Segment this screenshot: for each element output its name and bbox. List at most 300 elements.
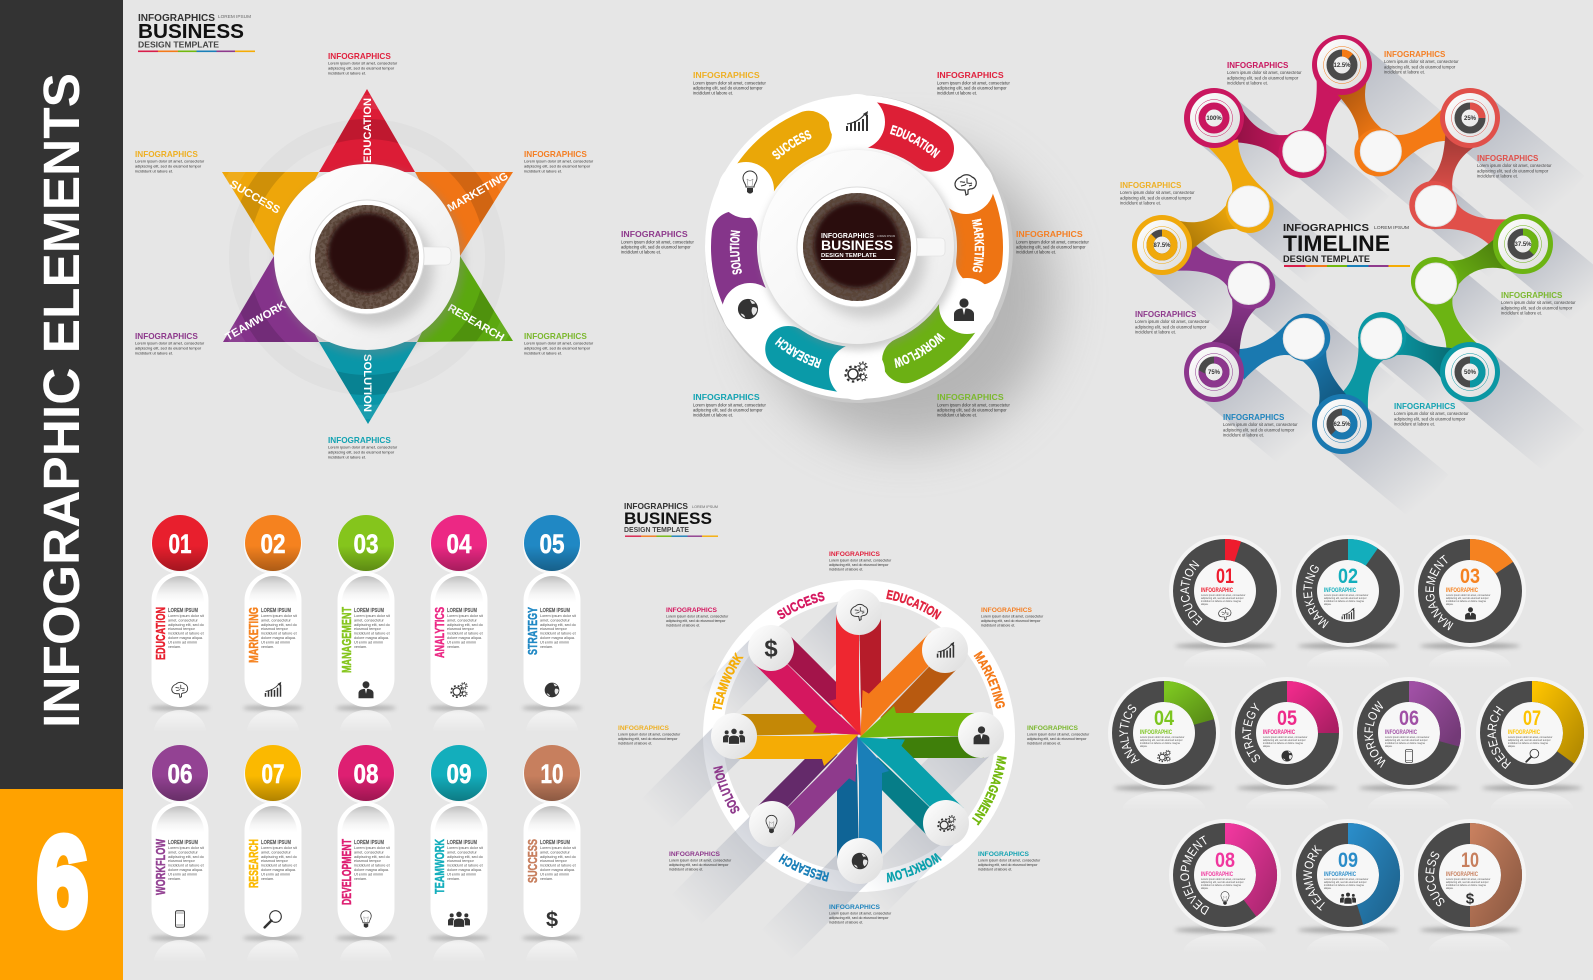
donut 04 analytics: 04 <box>1154 707 1174 730</box>
coffee cup with title: INFOGRAPHICS <box>821 233 874 240</box>
label: solution: Lorem ipsum dolor sit amet, consectetur <box>669 859 732 863</box>
star triangles <box>212 89 522 424</box>
connector: yellow with small node <box>1146 128 1296 277</box>
card 03 management: Ut enim ad minim <box>354 640 383 644</box>
label: solution: INFOGRAPHICS <box>621 229 688 239</box>
donut 06 workflow: Lorem ipsum dolor sit amet, consectetur <box>1385 736 1430 739</box>
card 05 strategy: LOREM IPSUM <box>540 608 570 614</box>
label: teamwork: Lorem ipsum dolor sit amet, consectetur <box>618 733 681 737</box>
card 10 success: SUCCESS <box>525 839 540 883</box>
label: 87.5%: incididunt ut labore et. <box>1120 200 1161 206</box>
donut 03 management: adipiscing elit, sed do eiusmod tempor <box>1446 597 1489 600</box>
faint background rings <box>229 119 505 395</box>
card 07 research: veniam. <box>261 877 274 881</box>
label: research: adipiscing elit, sed do eiusmod tempor <box>524 346 591 350</box>
label: 75%: INFOGRAPHICS <box>1135 310 1197 319</box>
label: solution: incididunt ut labore et. <box>621 250 661 255</box>
donut 05 strategy: Lorem ipsum dolor sit amet, consectetur <box>1263 736 1308 739</box>
heading: timeline: DESIGN TEMPLATE <box>1283 254 1370 264</box>
card 07 research <box>243 745 303 962</box>
label: management: Lorem ipsum dolor sit amet, consectetur <box>1027 733 1090 737</box>
donut 06 workflow: incididunt ut labore et dolore magna <box>1385 742 1425 745</box>
label: success: INFOGRAPHICS <box>693 70 760 80</box>
card 04 analytics <box>429 515 489 732</box>
label: success: Lorem ipsum dolor sit amet, consectetur <box>693 80 766 85</box>
donut 08 development <box>1169 819 1281 935</box>
label: teamwork: adipiscing elit, sed do eiusmod tempor <box>135 346 202 350</box>
donut 07 research: INFOGRAPHIC <box>1508 730 1541 736</box>
label: education <box>328 52 398 76</box>
label: teamwork <box>135 332 205 356</box>
ring drop shadow <box>755 145 1055 445</box>
card 08 development: dolore magna aliqua. <box>354 868 389 872</box>
card 03 management: incididunt ut labore et <box>354 632 391 636</box>
ring segment labels: WORKFLOW <box>894 332 946 368</box>
donut 03 management: aliqua. <box>1446 603 1454 606</box>
heading: timeline <box>1283 222 1410 267</box>
node: 75%: 75% <box>1208 370 1221 376</box>
coffee cup with title: BUSINESS <box>821 238 893 253</box>
connector: orange with small node <box>1310 49 1460 198</box>
card 06 workflow: veniam. <box>168 877 181 881</box>
curved ring labels: SUCCESS <box>777 592 825 619</box>
card 04 analytics: LOREM IPSUM <box>447 608 477 614</box>
card 07 research: amet, consectetur <box>261 850 292 854</box>
curved ring labels: MARKETING <box>974 650 1005 709</box>
card 01 education: amet, consectetur <box>168 618 199 622</box>
label: success: adipiscing elit, sed do eiusmod tempor <box>693 86 763 90</box>
ring segment labels: SUCCESS <box>772 130 812 160</box>
label: 50%: incididunt ut labore et. <box>1394 422 1435 426</box>
label: education: Lorem ipsum dolor sit amet, consectetur <box>937 80 1010 85</box>
ring icons <box>738 111 976 382</box>
label: education <box>937 70 1010 96</box>
curved ring labels: TEAMWORK <box>712 652 744 710</box>
label: 87.5%: adipiscing elit, sed do eiusmod tempor <box>1120 195 1192 200</box>
star arm labels: SOLUTION <box>361 354 373 412</box>
label: research: incididunt ut labore et. <box>829 921 863 925</box>
card 06 workflow: incididunt ut labore et <box>168 864 205 868</box>
card 04 analytics: veniam. <box>447 645 460 649</box>
label: management: adipiscing elit, sed do eiusmod tempor <box>1027 737 1087 741</box>
card 08 development: veniam. <box>354 877 367 881</box>
card 08 development: amet, consectetur <box>354 850 385 854</box>
card 01 education: veniam. <box>168 645 181 649</box>
label: marketing: Lorem ipsum dolor sit amet, consectetur <box>981 615 1044 619</box>
card 06 workflow: Ut enim ad minim <box>168 872 197 876</box>
donut 01 education <box>1169 535 1281 651</box>
label: marketing <box>981 607 1044 628</box>
donut 02 marketing <box>1292 535 1404 651</box>
label: success: INFOGRAPHICS <box>135 150 198 159</box>
card 09 teamwork: incididunt ut labore et <box>447 864 484 868</box>
heading: business template 2: LOREM IPSUM <box>692 505 718 509</box>
label: workflow: Lorem ipsum dolor sit amet, consectetur <box>937 402 1010 407</box>
label: workflow: INFOGRAPHICS <box>937 392 1004 402</box>
card 03 management: dolore magna aliqua. <box>354 636 389 640</box>
curved ring labels <box>712 590 1007 882</box>
label: solution: incididunt ut labore et. <box>328 454 366 460</box>
label: 50%: Lorem ipsum dolor sit amet, consectetur <box>1394 411 1469 416</box>
label: workflow: adipiscing elit, sed do eiusmod tempor <box>937 408 1007 412</box>
donut 04 analytics: adipiscing elit, sed do eiusmod tempor <box>1140 739 1183 742</box>
label: marketing: incididunt ut labore et. <box>524 168 562 174</box>
label: solution <box>621 229 694 255</box>
node: 50% <box>1440 342 1500 402</box>
donut 03 management: INFOGRAPHIC <box>1446 588 1479 594</box>
card 06 workflow <box>150 745 210 962</box>
card 03 management <box>336 515 396 732</box>
panel: numbered pill cards <box>150 515 582 962</box>
label: research <box>524 332 594 356</box>
donut 03 management: Lorem ipsum dolor sit amet, consectetur <box>1446 594 1491 597</box>
donut 05 strategy <box>1231 677 1343 793</box>
label: 25% <box>1477 154 1552 178</box>
card 05 strategy: Ut enim ad minim <box>540 640 569 644</box>
label: education: adipiscing elit, sed do eiusmod tempor <box>829 563 889 567</box>
donut 02 marketing: aliqua. <box>1324 603 1332 606</box>
label: 75%: Lorem ipsum dolor sit amet, consectetur <box>1135 319 1210 324</box>
donut 03 management: 03 <box>1460 565 1480 588</box>
card 05 strategy: STRATEGY <box>525 607 540 655</box>
card 02 marketing: amet, consectetur <box>261 618 292 622</box>
label: solution <box>328 436 398 460</box>
label: 62.5%: adipiscing elit, sed do eiusmod tempor <box>1223 427 1295 432</box>
card 08 development: eiusmod tempor <box>354 859 382 863</box>
heading: business template 1: BUSINESS <box>138 21 244 43</box>
donut 07 research: aliqua. <box>1508 745 1516 748</box>
card 10 success: adipiscing elit, sed do <box>540 855 576 859</box>
label: education: adipiscing elit, sed do eiusmod tempor <box>328 66 395 70</box>
donut 10 success: incididunt ut labore et dolore magna <box>1446 884 1486 887</box>
heading: business template 1: LOREM IPSUM <box>218 14 251 19</box>
label: 62.5% <box>1223 413 1298 438</box>
card 09 teamwork: Ut enim ad minim <box>447 872 476 876</box>
label: success <box>135 150 205 174</box>
label: research: INFOGRAPHICS <box>524 332 587 341</box>
card 04 analytics: amet, consectetur <box>447 618 478 622</box>
label: research <box>829 904 892 925</box>
donut 05 strategy: incididunt ut labore et dolore magna <box>1263 742 1303 745</box>
card 01 education: adipiscing elit, sed do <box>168 623 204 627</box>
card 05 strategy: amet, consectetur <box>540 618 571 622</box>
label: 87.5%: Lorem ipsum dolor sit amet, consectetur <box>1120 190 1195 195</box>
label: marketing: INFOGRAPHICS <box>1016 229 1083 239</box>
donut 05 strategy: adipiscing elit, sed do eiusmod tempor <box>1263 739 1306 742</box>
curved ring labels: WORKFLOW <box>886 853 942 882</box>
card 05 strategy <box>522 515 582 732</box>
donut 10 success: aliqua. <box>1446 887 1454 890</box>
donut 06 workflow: INFOGRAPHIC <box>1385 730 1418 736</box>
card 10 success: dolore magna aliqua. <box>540 868 575 872</box>
label: 100%: incididunt ut labore et. <box>1227 80 1268 86</box>
card 03 management: veniam. <box>354 645 367 649</box>
label: solution: INFOGRAPHICS <box>669 851 720 858</box>
card 03 management: 03 <box>354 529 378 559</box>
card 03 management: MANAGEMENT <box>339 607 354 673</box>
card 08 development: LOREM IPSUM <box>354 840 384 846</box>
label: solution: INFOGRAPHICS <box>328 436 391 445</box>
star arm labels: RESEARCH <box>446 302 506 344</box>
node: 100% <box>1184 88 1244 148</box>
coloured ring segments <box>688 78 1026 416</box>
donut 06 workflow: aliqua. <box>1385 745 1393 748</box>
star arm labels <box>224 98 510 412</box>
ring segment labels: SOLUTION <box>730 230 742 274</box>
donut 10 success: Lorem ipsum dolor sit amet, consectetur <box>1446 878 1491 881</box>
donut 08 development: DEVELOPMENT <box>1180 835 1210 915</box>
heading: timeline: TIMELINE <box>1283 231 1390 256</box>
label: solution: incididunt ut labore et. <box>669 868 703 872</box>
label: 37.5%: incididunt ut labore et. <box>1501 310 1542 316</box>
card 07 research: Lorem ipsum dolor sit <box>261 846 298 850</box>
card 01 education: Ut enim ad minim <box>168 640 197 644</box>
card 05 strategy: 05 <box>540 529 564 559</box>
label: success: adipiscing elit, sed do eiusmod tempor <box>135 164 202 168</box>
sidebar: orange number block: 6 <box>37 813 88 952</box>
card 04 analytics: 04 <box>446 529 472 559</box>
donut 10 success: INFOGRAPHIC <box>1446 872 1479 878</box>
white ring base <box>705 95 1013 403</box>
label: marketing: adipiscing elit, sed do eiusmod tempor <box>524 164 591 168</box>
label: marketing: adipiscing elit, sed do eiusmod tempor <box>981 619 1041 623</box>
label: 100%: adipiscing elit, sed do eiusmod tempor <box>1227 75 1299 80</box>
label: success <box>666 607 729 628</box>
donut 10 success <box>1414 819 1526 935</box>
label: education <box>829 551 892 572</box>
label: 75% <box>1135 310 1210 334</box>
label: research: Lorem ipsum dolor sit amet, consectetur <box>693 402 766 407</box>
label: 25%: incididunt ut labore et. <box>1477 174 1518 178</box>
label: workflow: Lorem ipsum dolor sit amet, consectetur <box>978 859 1041 863</box>
label: marketing: incididunt ut labore et. <box>981 624 1015 628</box>
label: 100%: INFOGRAPHICS <box>1227 61 1289 70</box>
label: workflow: incididunt ut labore et. <box>978 868 1012 872</box>
donut 01 education: EDUCATION <box>1180 560 1202 626</box>
coffee cup with title <box>760 150 958 350</box>
label: success <box>693 70 766 96</box>
node: 12.5%: 12.5% <box>1333 63 1351 69</box>
donut 07 research: Lorem ipsum dolor sit amet, consectetur <box>1508 736 1553 739</box>
label: teamwork: incididunt ut labore et. <box>135 350 173 356</box>
card 01 education: dolore magna aliqua. <box>168 636 203 640</box>
card 06 workflow: dolore magna aliqua. <box>168 868 203 872</box>
label: 87.5% <box>1120 181 1195 206</box>
label: education: Lorem ipsum dolor sit amet, consectetur <box>328 60 398 66</box>
label: marketing: Lorem ipsum dolor sit amet, consectetur <box>1016 239 1089 244</box>
label: research: incididunt ut labore et. <box>693 413 733 418</box>
label: management: INFOGRAPHICS <box>1027 725 1078 732</box>
card 03 management: eiusmod tempor <box>354 627 382 631</box>
node: 12.5% <box>1312 35 1372 95</box>
label: teamwork: INFOGRAPHICS <box>135 332 198 341</box>
label: 37.5%: adipiscing elit, sed do eiusmod tempor <box>1501 305 1573 310</box>
donut 04 analytics: ANALYTICS <box>1119 704 1140 764</box>
donut 09 teamwork: incididunt ut labore et dolore magna <box>1324 884 1364 887</box>
heading: business template 1: INFOGRAPHICS <box>138 13 215 24</box>
label: research: Lorem ipsum dolor sit amet, consectetur <box>829 912 892 916</box>
white outer ring <box>713 590 1005 882</box>
card 02 marketing: LOREM IPSUM <box>261 608 291 614</box>
curved ring labels: SOLUTION <box>713 766 740 814</box>
label: workflow: INFOGRAPHICS <box>978 851 1029 858</box>
card 06 workflow: LOREM IPSUM <box>168 840 198 846</box>
label: teamwork <box>618 725 681 746</box>
donut 07 research <box>1476 677 1588 793</box>
donut 02 marketing: MARKETING <box>1303 564 1329 628</box>
heading: business template 2: BUSINESS <box>624 509 712 528</box>
donut 02 marketing: Lorem ipsum dolor sit amet, consectetur <box>1324 594 1369 597</box>
card 10 success <box>522 745 582 962</box>
node: 50%: 50% <box>1464 370 1477 376</box>
curved ring labels: RESEARCH <box>778 854 830 882</box>
sidebar: orange number block <box>0 789 123 980</box>
card 06 workflow: adipiscing elit, sed do <box>168 855 204 859</box>
card 02 marketing: eiusmod tempor <box>261 627 289 631</box>
label: 62.5%: Lorem ipsum dolor sit amet, consectetur <box>1223 422 1298 427</box>
heading: timeline: LOREM IPSUM <box>1374 225 1409 231</box>
label: 25%: Lorem ipsum dolor sit amet, consectetur <box>1477 163 1552 168</box>
connector: teal with small node <box>1341 312 1455 410</box>
heading: business template 2: DESIGN TEMPLATE <box>624 527 689 534</box>
card 09 teamwork: Lorem ipsum dolor sit <box>447 846 484 850</box>
card 05 strategy: dolore magna aliqua. <box>540 636 575 640</box>
card 04 analytics: Ut enim ad minim <box>447 640 476 644</box>
card 07 research: adipiscing elit, sed do <box>261 855 297 859</box>
donut 05 strategy: 05 <box>1277 707 1297 730</box>
card 04 analytics: adipiscing elit, sed do <box>447 623 483 627</box>
donut 09 teamwork: adipiscing elit, sed do eiusmod tempor <box>1324 881 1367 884</box>
card 09 teamwork: 09 <box>446 759 472 789</box>
donut 02 marketing: incididunt ut labore et dolore magna <box>1324 600 1364 603</box>
label: marketing: Lorem ipsum dolor sit amet, consectetur <box>524 158 594 164</box>
label: 75%: adipiscing elit, sed do eiusmod tempor <box>1135 324 1207 329</box>
donut 08 development: incididunt ut labore et dolore magna <box>1201 884 1241 887</box>
sidebar: dark panel with vertical title <box>0 0 123 789</box>
donut 10 success: SUCCESS <box>1425 852 1444 906</box>
card 02 marketing: Ut enim ad minim <box>261 640 290 644</box>
panel: circular ring coffee infographic <box>621 70 1089 466</box>
card 09 teamwork: veniam. <box>447 877 460 881</box>
donut 08 development: Lorem ipsum dolor sit amet, consectetur <box>1201 878 1246 881</box>
panel: star coffee infographic <box>135 13 594 460</box>
label: workflow: adipiscing elit, sed do eiusmod tempor <box>978 863 1038 867</box>
card 07 research: 07 <box>262 759 284 789</box>
card 01 education <box>150 515 210 732</box>
card 02 marketing: dolore magna aliqua. <box>261 636 296 640</box>
donut 09 teamwork: 09 <box>1338 849 1358 872</box>
card 03 management: adipiscing elit, sed do <box>354 623 390 627</box>
card 01 education: EDUCATION <box>153 607 168 660</box>
label: teamwork: Lorem ipsum dolor sit amet, consectetur <box>135 340 205 346</box>
ring segment labels <box>730 124 984 368</box>
label: success: Lorem ipsum dolor sit amet, consectetur <box>666 615 729 619</box>
label: 25%: adipiscing elit, sed do eiusmod tempor <box>1477 168 1549 173</box>
long diagonal shadows <box>1162 65 1593 497</box>
donut 01 education: incididunt ut labore et dolore magna <box>1201 600 1241 603</box>
card 10 success: veniam. <box>540 877 553 881</box>
donut 10 success: adipiscing elit, sed do eiusmod tempor <box>1446 881 1489 884</box>
label: research: INFOGRAPHICS <box>693 392 760 402</box>
round icon buttons <box>711 589 1004 884</box>
label: marketing <box>1016 229 1089 255</box>
label: workflow <box>937 392 1010 418</box>
card 02 marketing: adipiscing elit, sed do <box>261 623 297 627</box>
ring segment labels: MARKETING <box>972 218 984 272</box>
label: 12.5%: Lorem ipsum dolor sit amet, consectetur <box>1384 59 1459 64</box>
label: 50%: INFOGRAPHICS <box>1394 402 1456 411</box>
card 06 workflow: eiusmod tempor <box>168 859 196 863</box>
card 03 management: LOREM IPSUM <box>354 608 384 614</box>
card 06 workflow: amet, consectetur <box>168 850 199 854</box>
label: success: incididunt ut labore et. <box>666 624 700 628</box>
heading: business template 1: DESIGN TEMPLATE <box>138 40 219 50</box>
card 04 analytics: eiusmod tempor <box>447 627 475 631</box>
card 02 marketing: Lorem ipsum dolor sit <box>261 614 298 618</box>
card 08 development <box>336 745 396 962</box>
label: marketing: INFOGRAPHICS <box>524 150 587 159</box>
panel: donut progress set <box>1108 535 1588 935</box>
coffee cup on saucer <box>274 164 465 356</box>
donut 09 teamwork: TEAMWORK <box>1303 844 1325 911</box>
donut 08 development: INFOGRAPHIC <box>1201 872 1234 878</box>
card 01 education: LOREM IPSUM <box>168 608 198 614</box>
label: success: incididunt ut labore et. <box>135 168 173 174</box>
label: 50%: adipiscing elit, sed do eiusmod tempor <box>1394 416 1466 421</box>
label: teamwork: INFOGRAPHICS <box>618 725 669 732</box>
card 04 analytics: ANALYTICS <box>432 607 447 658</box>
label: workflow: incididunt ut labore et. <box>937 413 977 418</box>
card 05 strategy: veniam. <box>540 645 553 649</box>
label: 37.5% <box>1501 291 1576 316</box>
card 09 teamwork: amet, consectetur <box>447 850 478 854</box>
card 08 development: Ut enim ad minim <box>354 872 383 876</box>
donut 06 workflow <box>1353 677 1465 793</box>
donut 09 teamwork <box>1292 819 1404 935</box>
sidebar: dark panel with vertical title: INFOGRAPHIC ELEMENTS <box>33 73 90 728</box>
donut 05 strategy: INFOGRAPHIC <box>1263 730 1296 736</box>
connector: coral with small node <box>1409 133 1507 246</box>
label: 12.5%: incididunt ut labore et. <box>1384 70 1425 74</box>
label: 37.5%: Lorem ipsum dolor sit amet, consectetur <box>1501 300 1576 305</box>
donut 03 management <box>1414 535 1526 651</box>
card 04 analytics: incididunt ut labore et <box>447 632 484 636</box>
label: success: adipiscing elit, sed do eiusmod tempor <box>666 619 726 623</box>
label: education: Lorem ipsum dolor sit amet, consectetur <box>829 559 892 563</box>
card 07 research: incididunt ut labore et <box>261 864 298 868</box>
node: 25%: 25% <box>1464 116 1477 122</box>
donut 02 marketing: INFOGRAPHIC <box>1324 588 1357 594</box>
card 05 strategy: Lorem ipsum dolor sit <box>540 614 577 618</box>
label: 100% <box>1227 61 1302 86</box>
label: education: incididunt ut labore et. <box>328 70 366 76</box>
label: education: INFOGRAPHICS <box>328 52 391 61</box>
label: education: adipiscing elit, sed do eiusmod tempor <box>937 86 1007 90</box>
donut 03 management: MANAGEMENT <box>1425 554 1454 630</box>
donut 05 strategy: STRATEGY <box>1242 702 1260 762</box>
label: 25%: INFOGRAPHICS <box>1477 154 1539 163</box>
heading: business template 2 <box>624 501 718 537</box>
card 03 management: amet, consectetur <box>354 618 385 622</box>
node: 62.5% <box>1312 394 1372 454</box>
label: marketing: INFOGRAPHICS <box>981 607 1032 614</box>
donut 06 workflow: WORKFLOW <box>1364 700 1386 768</box>
white ring icon blobs <box>718 94 995 400</box>
donut 07 research: adipiscing elit, sed do eiusmod tempor <box>1508 739 1551 742</box>
label: research: INFOGRAPHICS <box>829 904 880 911</box>
card 09 teamwork <box>429 745 489 962</box>
heading: business template 2: INFOGRAPHICS <box>624 501 688 511</box>
